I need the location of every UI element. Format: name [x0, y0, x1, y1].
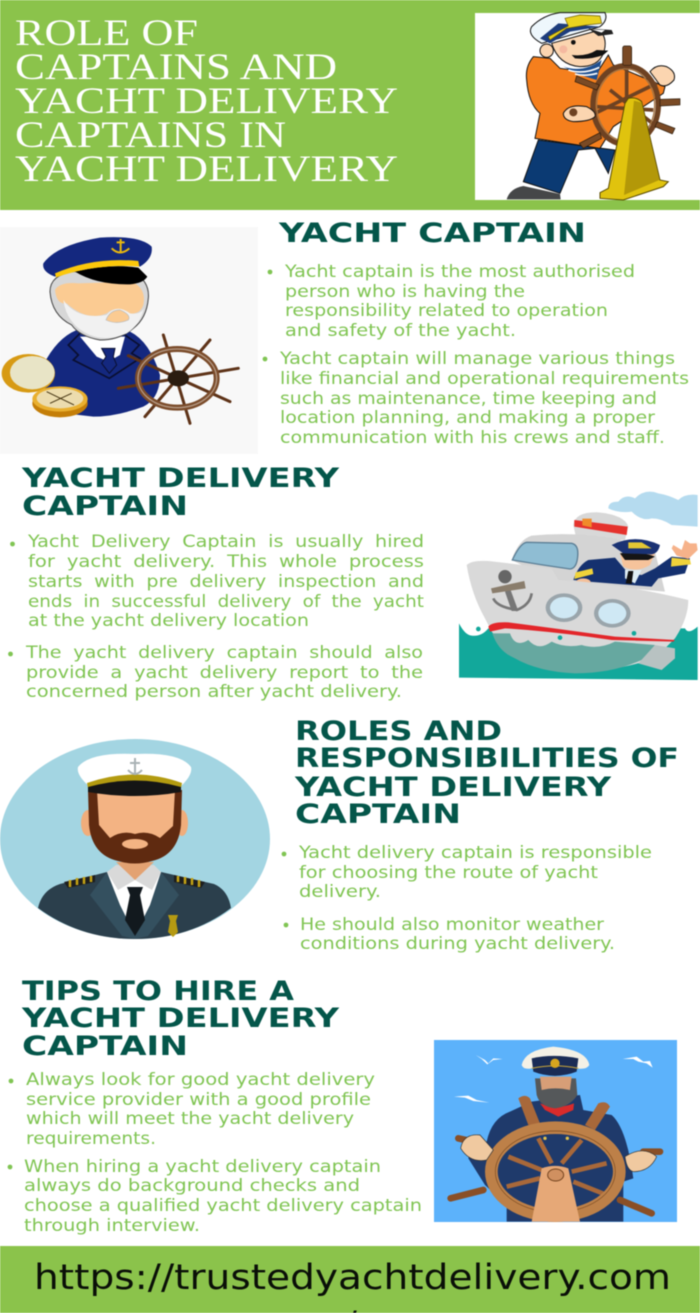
icon: ship wheel	[118, 335, 238, 423]
website url	[34, 1258, 671, 1313]
captain on boat	[573, 539, 698, 587]
heading: ROLES AND	[295, 716, 502, 747]
bullet points: starts with pre delivery inspection and	[28, 572, 424, 592]
header banner	[0, 0, 700, 210]
title: YACHT DELIVERY	[15, 149, 398, 190]
face and beard	[535, 1078, 577, 1108]
cap	[78, 754, 191, 796]
cap	[75, 266, 147, 284]
heading	[21, 976, 340, 1062]
bullet points: conditions during yacht delivery.	[300, 934, 615, 954]
icon: anchor	[491, 570, 532, 611]
medal	[168, 915, 178, 937]
title: CAPTAINS IN	[15, 115, 286, 156]
title: CAPTAINS AND	[15, 47, 337, 88]
section: yacht delivery captain	[8, 463, 424, 702]
icon: compass	[2, 354, 88, 417]
bullet points: When hiring a yacht delivery captain	[24, 1157, 381, 1177]
heading: RESPONSIBILITIES OF	[295, 743, 679, 774]
footer banner	[0, 1246, 700, 1313]
bullet points: and safety of the yacht.	[285, 321, 516, 341]
bullet points: choose a qualified yacht delivery captain	[24, 1196, 422, 1216]
bullet points: communication with his crews and staff.	[280, 428, 665, 448]
cabin	[512, 534, 665, 592]
illustration: boat with waving captain	[459, 492, 698, 680]
bullet points: requirements.	[26, 1129, 156, 1149]
heading: YACHT DELIVERY	[21, 463, 340, 494]
title: YACHT DELIVERY	[15, 81, 398, 122]
buttons	[543, 1137, 547, 1140]
bullet points	[263, 262, 689, 448]
bullet points	[282, 843, 652, 954]
coat	[468, 1095, 633, 1222]
ship wheel	[451, 1128, 660, 1222]
bullet points: at the yacht delivery location	[28, 611, 309, 631]
bullet points: He should also monitor weather	[300, 915, 604, 935]
straps	[518, 1096, 540, 1125]
bullet points: Yacht Delivery Captain is usually hired	[27, 532, 424, 552]
bullet points: like financial and operational requirements	[280, 369, 689, 389]
bullet points: such as maintenance, time keeping and	[280, 389, 657, 409]
smoke cloud	[608, 492, 698, 527]
bullet points: which will meet the yacht delivery	[26, 1109, 354, 1129]
bullet points: Yacht delivery captain is responsible	[298, 843, 652, 863]
heading: YACHT DELIVERY	[294, 772, 612, 803]
bullet points: responsibility related to operation	[285, 301, 608, 321]
title	[15, 13, 398, 190]
bullet points: Always look for good yacht delivery	[26, 1070, 375, 1090]
section: yacht captain	[263, 218, 689, 448]
bullet points: Yacht captain will manage various things	[279, 349, 675, 369]
bullet points: location planning, and making a proper	[280, 408, 655, 428]
bullet points	[8, 1070, 422, 1236]
portholes	[546, 593, 631, 628]
heading: CAPTAIN	[295, 799, 461, 830]
heading	[21, 463, 340, 522]
heading: YACHT DELIVERY	[21, 1003, 340, 1034]
cap	[522, 1047, 589, 1069]
scarf	[540, 1103, 574, 1117]
bullet points: through interview.	[24, 1216, 200, 1236]
website url: https://trustedyachtdelivery.com	[34, 1258, 671, 1298]
bullet points: for yacht delivery. This whole process	[28, 552, 424, 572]
section: roles and responsibilities	[282, 716, 679, 954]
hands	[461, 1135, 493, 1161]
funnel	[573, 512, 628, 540]
epaulettes	[64, 875, 205, 888]
title: ROLE OF	[15, 13, 198, 54]
heading: CAPTAIN	[22, 1031, 188, 1062]
heading: TIPS TO HIRE A	[22, 976, 294, 1007]
illustration: bearded captain in circle	[0, 739, 270, 939]
head	[88, 790, 182, 864]
bullet points: Yacht captain is the most authorised	[284, 262, 635, 282]
head	[50, 272, 148, 340]
illustration: captain in orange coat steering wheel	[475, 13, 700, 200]
section: tips to hire	[8, 976, 422, 1236]
bullet points: delivery.	[299, 882, 381, 902]
hull	[467, 561, 688, 672]
seagulls	[454, 1055, 653, 1103]
bullet points: always do background checks and	[24, 1176, 360, 1196]
tie	[125, 887, 145, 936]
illustration: captain at wheel on blue background	[434, 1040, 677, 1222]
water drops	[476, 627, 636, 640]
bullet points: person who is having the	[285, 282, 525, 302]
bullet points: service provider with a good profile	[26, 1090, 371, 1110]
bullet points: The yacht delivery captain should also	[25, 643, 423, 663]
jacket	[38, 872, 231, 939]
ears	[81, 810, 95, 836]
heading: YACHT CAPTAIN	[278, 218, 586, 249]
captain body	[43, 330, 160, 417]
bullet points	[8, 532, 424, 702]
heading: CAPTAIN	[22, 491, 188, 522]
bullet points: for choosing the route of yacht	[299, 863, 598, 883]
heading	[294, 716, 679, 830]
bullet points: ends in successful delivery of the yacht	[28, 592, 424, 612]
sea	[459, 623, 698, 680]
bullet points: provide a yacht delivery report to the	[26, 663, 423, 683]
bullet points: concerned person after yacht delivery.	[26, 682, 402, 702]
panel: yacht captain illustration	[0, 227, 258, 454]
